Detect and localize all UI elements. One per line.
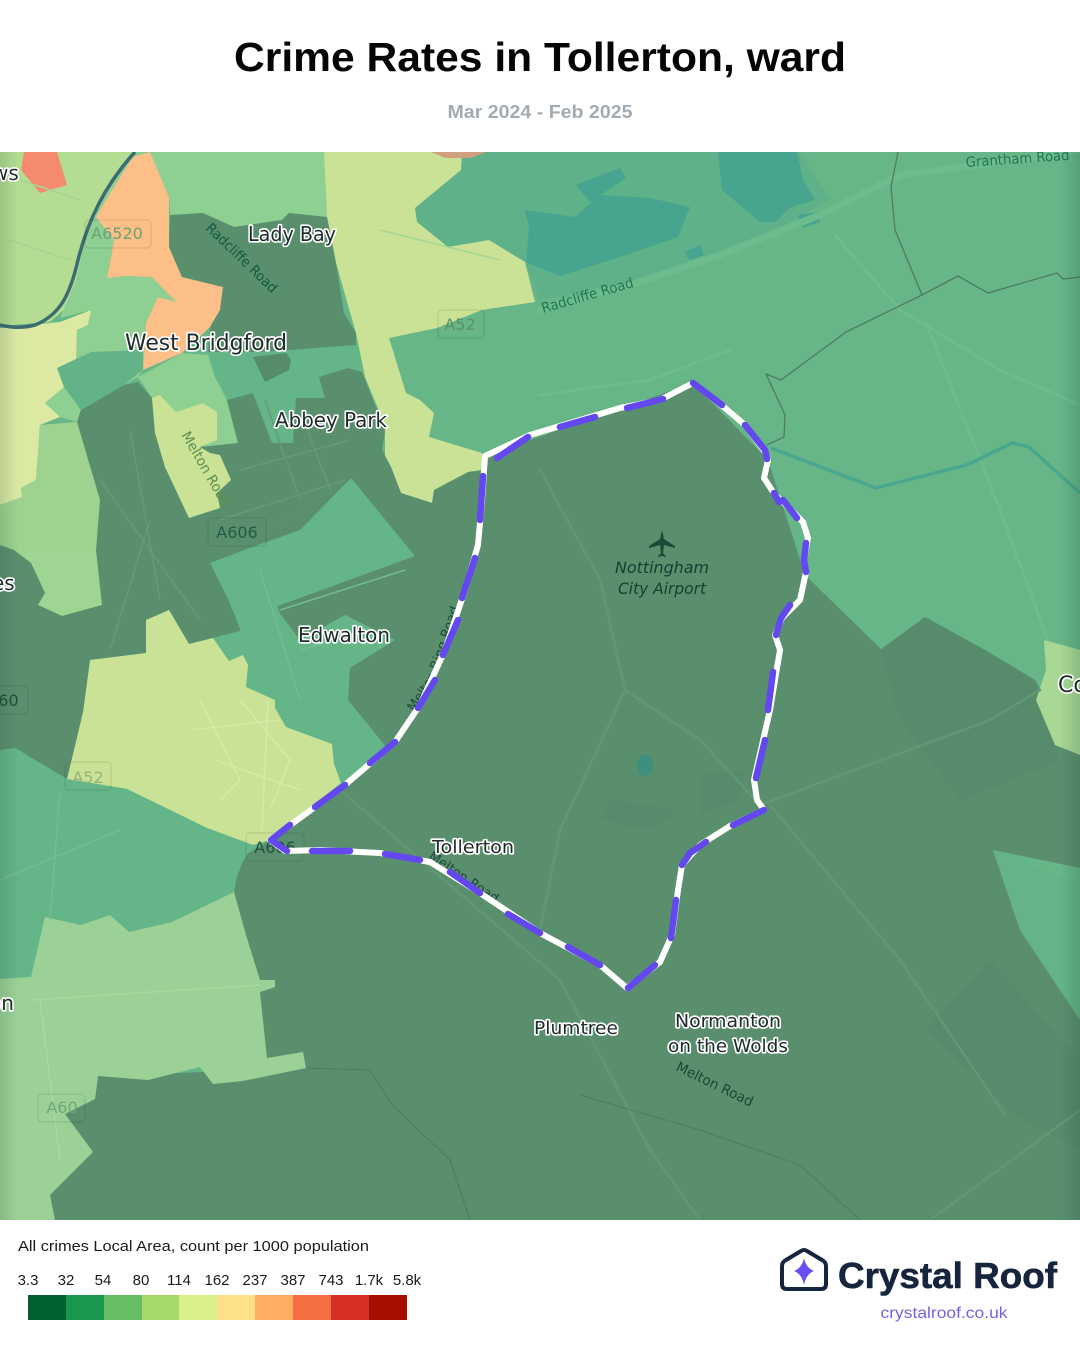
- legend value labels: [18, 1272, 422, 1289]
- medium strip Edwalton: [210, 478, 415, 783]
- road shields: A606: [254, 838, 296, 857]
- legend value labels: 80: [133, 1272, 149, 1289]
- Cotgrave patch: [1036, 640, 1080, 755]
- legend value labels: 743: [318, 1272, 344, 1289]
- label: airport: [615, 558, 709, 598]
- top mid light-green area: [150, 152, 327, 227]
- place labels: West Bridgford: [125, 331, 287, 356]
- website: crystalroof.co.uk: [880, 1305, 1009, 1322]
- orange: high-rate area: [96, 152, 223, 370]
- dark area Abbey Park: [189, 368, 391, 522]
- dark area Lady Bay: [169, 213, 356, 352]
- label: airport: City Airport: [618, 579, 707, 598]
- road names: Melton Road: [178, 429, 233, 510]
- low-rate zone south and ward: [48, 383, 1080, 1220]
- dark area west: [77, 382, 485, 747]
- road names: Melton Road: [673, 1059, 756, 1110]
- yellow-green east of Lady Bay: [324, 152, 535, 503]
- logo wordmark: Crystal Roof: [838, 1255, 1058, 1296]
- legend value labels: 5.8k: [393, 1272, 422, 1289]
- legend value labels: 54: [95, 1272, 111, 1289]
- far-west dark: [0, 545, 102, 779]
- road network on the east: [540, 150, 1080, 660]
- icon: Crystal Roof logo house: [782, 1250, 826, 1289]
- footer: [18, 1238, 1058, 1322]
- river Trent: [0, 152, 135, 327]
- medium patch west of orange: [57, 350, 143, 410]
- legend colour scale: [28, 1295, 407, 1320]
- parish lines: [306, 1068, 860, 1220]
- road shields: [0, 220, 484, 1122]
- red area: [21, 152, 67, 193]
- road shields: A60: [46, 1098, 78, 1117]
- legend value labels: 237: [242, 1272, 268, 1289]
- legend value labels: 32: [58, 1272, 74, 1289]
- legend value labels: 114: [167, 1272, 191, 1289]
- slightly darker fields: [600, 617, 1080, 1150]
- faint roads within ward: [340, 470, 1080, 1220]
- map panel: [0, 152, 1080, 1220]
- yellow field south: [67, 610, 341, 845]
- road shields: A606: [216, 523, 258, 542]
- west far pale-green plots: [0, 422, 100, 550]
- road shields: A52: [72, 768, 104, 787]
- legend value labels: 1.7k: [355, 1272, 384, 1289]
- place labels: Lady Bay: [248, 222, 336, 246]
- road names: Radcliffe Road: [540, 275, 635, 317]
- lower-left medium strip: [0, 748, 253, 979]
- road names: [178, 152, 1070, 1110]
- title: Crime Rates in Tollerton, ward: [234, 34, 846, 80]
- place labels: on the Wolds: [668, 1036, 788, 1057]
- place labels: Normanton: [675, 1011, 781, 1032]
- yellow Melton Road strip: [152, 395, 231, 518]
- place labels: Plumtree: [534, 1018, 618, 1039]
- street texture: [0, 180, 500, 1160]
- canal: [771, 443, 1080, 493]
- ward boundary purple dashes: [271, 383, 806, 988]
- road names: Melton Ring Road: [406, 606, 456, 710]
- edge vignette: [0, 152, 18, 1220]
- road names: Melton Road: [429, 851, 500, 900]
- header: [234, 34, 846, 122]
- south-west light green: [0, 892, 306, 1220]
- legend value labels: 387: [280, 1272, 306, 1289]
- place labels: Edwalton: [298, 623, 390, 647]
- road names: Radcliffe Road: [202, 220, 280, 296]
- pink area at top edge: [431, 152, 486, 158]
- lakes: [525, 152, 820, 276]
- pale yellow west: [0, 310, 91, 505]
- west base light green: [0, 152, 150, 326]
- legend value labels: 3.3: [18, 1272, 38, 1289]
- small dark blocks: [253, 353, 291, 382]
- road shields: A52: [444, 315, 476, 334]
- legend value labels: 162: [204, 1272, 230, 1289]
- ward boundary white line: [270, 383, 808, 988]
- small pond: [637, 754, 653, 776]
- place labels: Tollerton: [431, 837, 514, 858]
- place labels: Abbey Park: [275, 408, 387, 432]
- west pale green wedge: [45, 152, 176, 422]
- base medium-rate area: [0, 152, 1080, 1220]
- road shields: A6520: [91, 224, 143, 243]
- legend title: All crimes Local Area, count per 1000 population: [18, 1238, 369, 1255]
- date range subtitle: Mar 2024 - Feb 2025: [448, 102, 632, 122]
- eastern boundaries: [766, 152, 1080, 445]
- place labels: [0, 161, 1080, 1057]
- eastern medium wedge: [993, 850, 1080, 1020]
- lake surroundings: [415, 152, 830, 300]
- icon: airplane: [649, 530, 675, 557]
- medium patch Abbey Park: [208, 345, 385, 510]
- light green south of orange: [138, 353, 238, 447]
- label: airport: Nottingham: [615, 558, 709, 577]
